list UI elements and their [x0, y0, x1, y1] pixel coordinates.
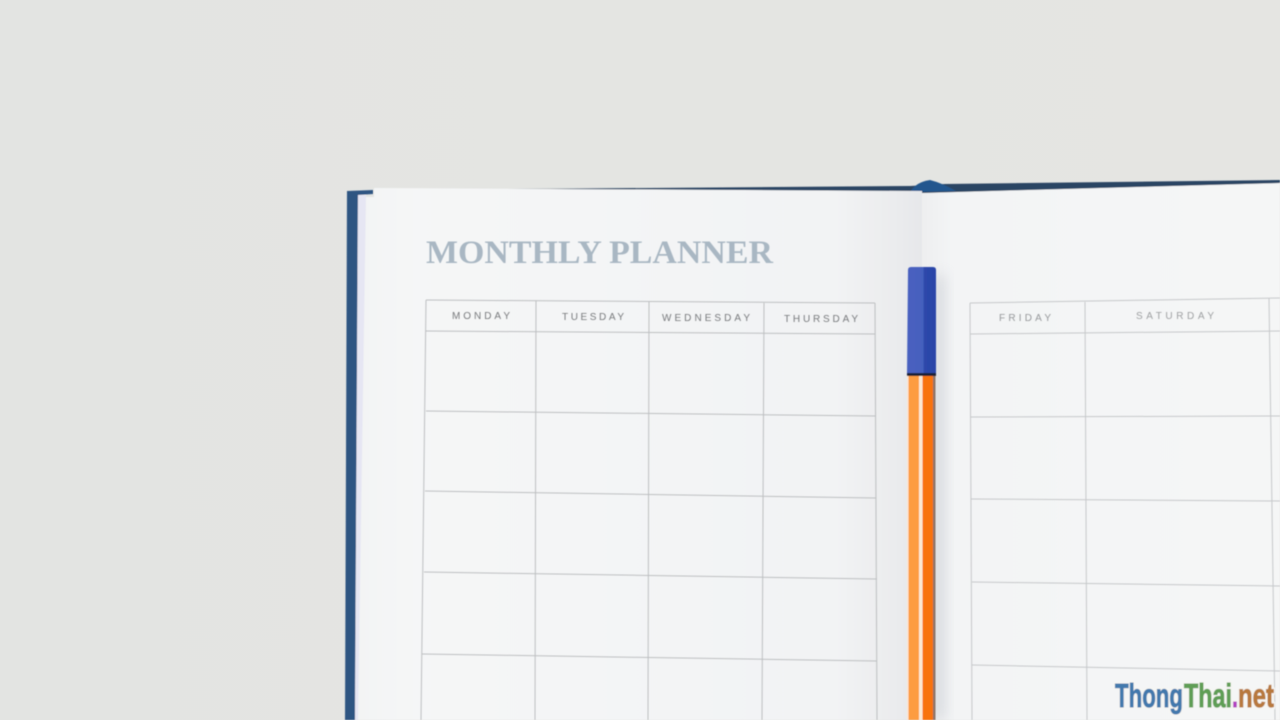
- watermark: ThongThai.net: Thai: [1184, 677, 1232, 714]
- watermark: ThongThai.net: [1115, 677, 1274, 714]
- weekday headers: TUESDAY: [562, 312, 624, 323]
- title: Monthly Planner: MONTHLY PLANNER: [426, 235, 774, 271]
- weekday headers: [452, 311, 1214, 325]
- planner book: [345, 180, 1280, 720]
- watermark: ThongThai.net: .: [1232, 677, 1238, 714]
- ribbon bookmark: [910, 180, 956, 192]
- left page: [358, 188, 922, 720]
- left page calendar grid: [421, 300, 877, 720]
- weekday headers: THURSDAY: [784, 314, 858, 325]
- weekday headers: MONDAY: [452, 311, 510, 322]
- book cover spine and top edge: [345, 180, 1280, 720]
- orange pen: [907, 267, 936, 720]
- weekday headers: SATURDAY: [1136, 311, 1214, 322]
- weekday headers: FRIDAY: [999, 313, 1051, 324]
- pen body: [908, 376, 935, 720]
- watermark: ThongThai.net: Thong: [1115, 677, 1183, 714]
- pen shadow: [934, 275, 944, 720]
- right page calendar grid: [970, 298, 1280, 720]
- weekday headers: WEDNESDAY: [662, 313, 750, 324]
- pen cap: [907, 267, 936, 376]
- page edge strip: [355, 195, 366, 720]
- right page: [922, 183, 1280, 720]
